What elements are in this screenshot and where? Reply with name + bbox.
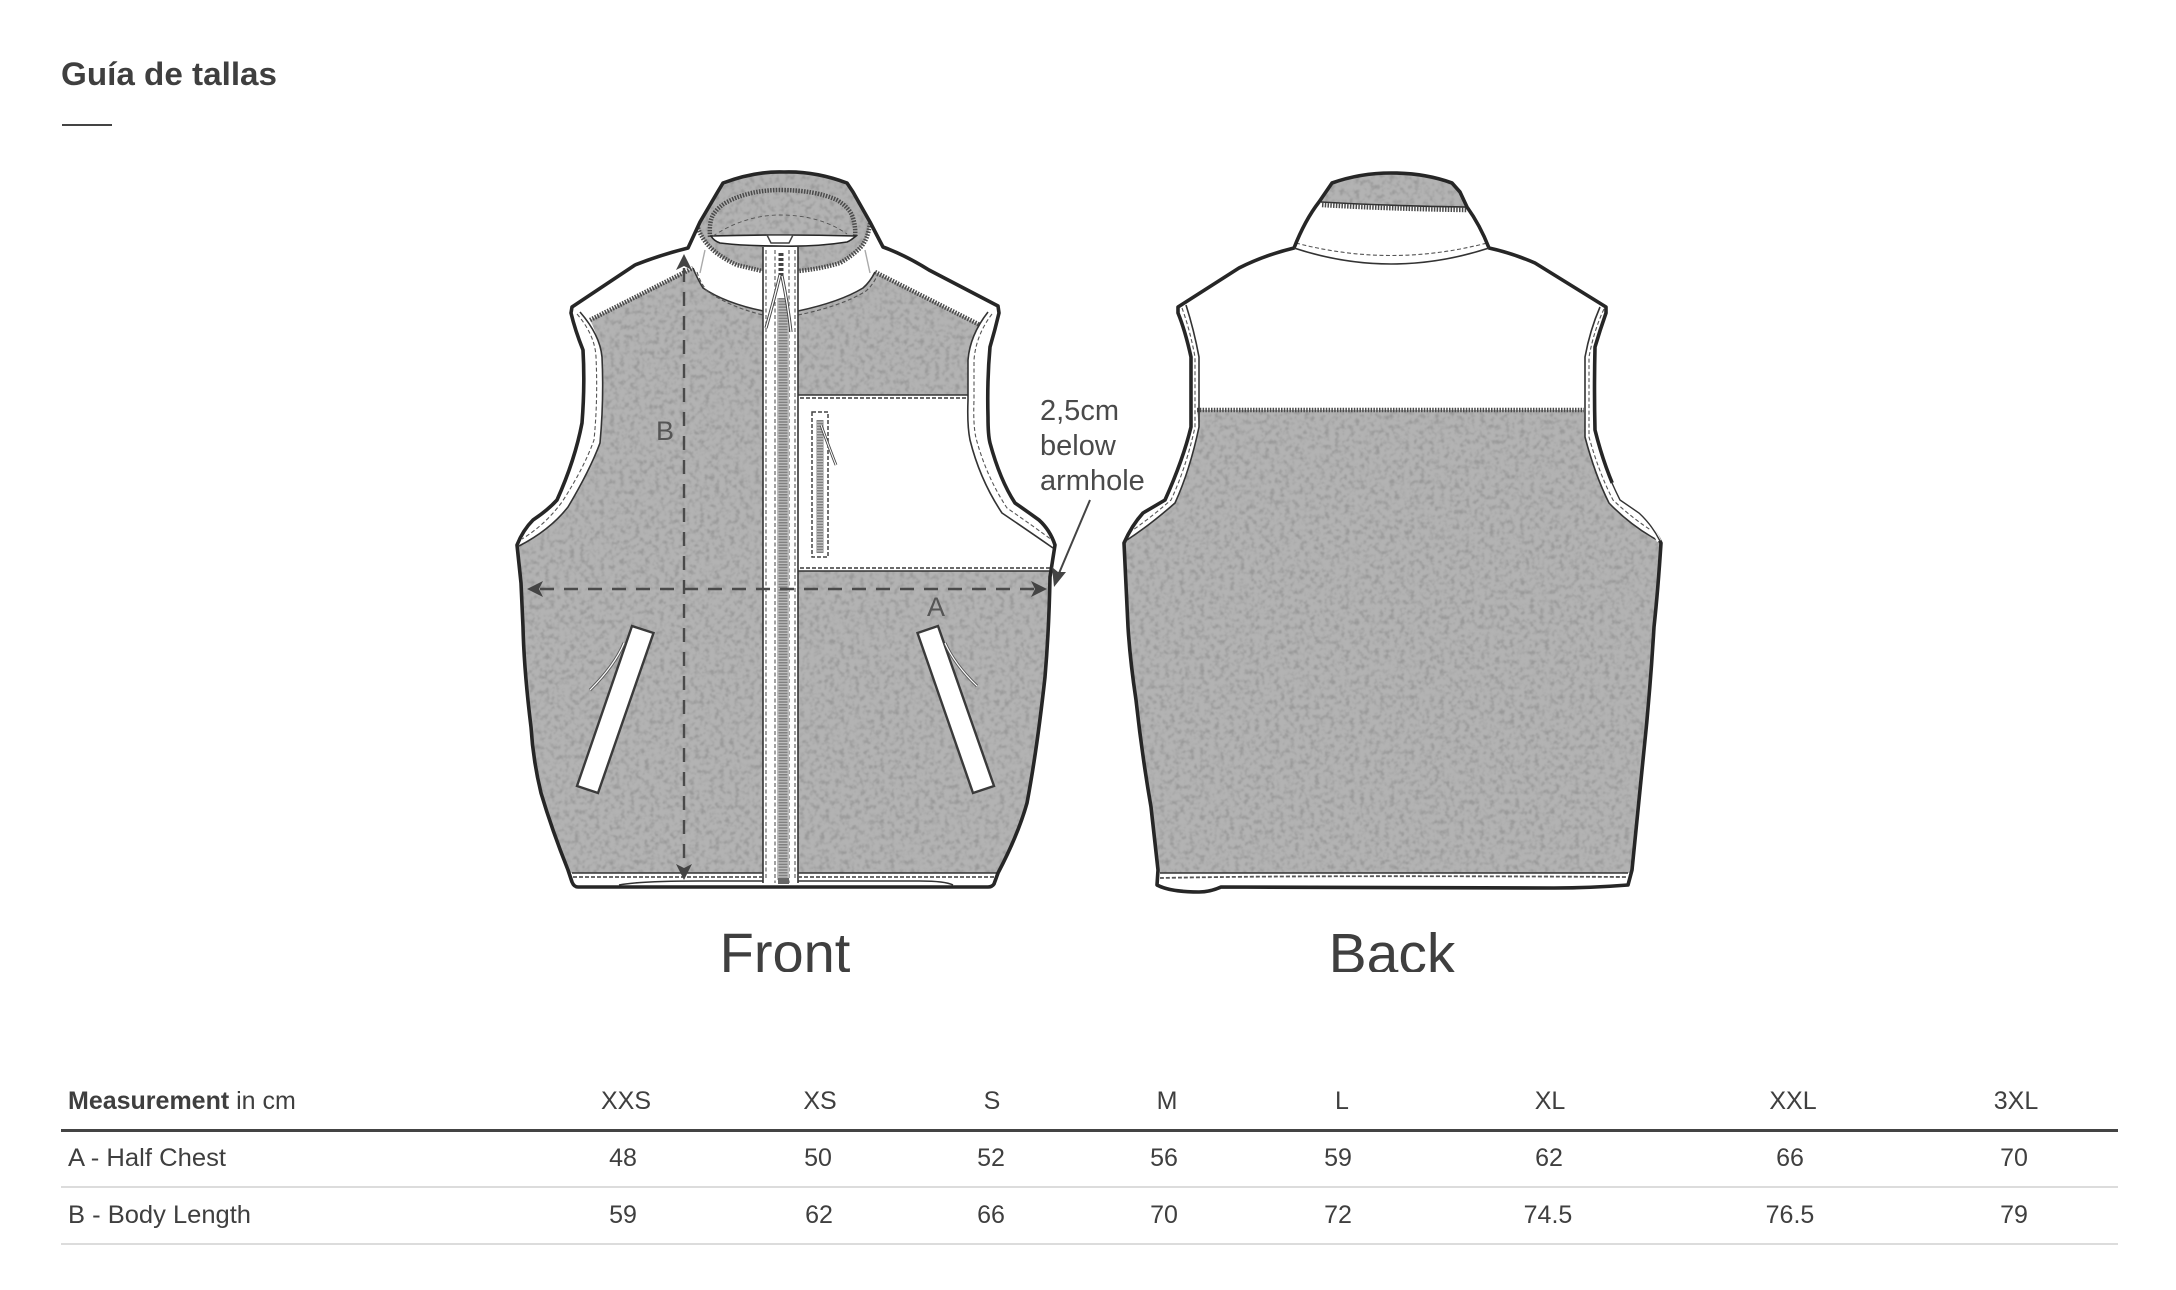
size table	[61, 1087, 2118, 1245]
row: half chest	[68, 1144, 2028, 1172]
row: body length: 76.5	[1766, 1201, 1814, 1229]
right hand pocket	[918, 626, 994, 793]
title: Guía de tallas	[61, 56, 277, 92]
front seams and binding	[519, 223, 1053, 571]
row: half chest: 52	[977, 1144, 1005, 1172]
front inner collar	[710, 190, 856, 246]
front fleece panels	[519, 172, 1051, 873]
table header: S	[984, 1087, 1000, 1115]
row: body length: 62	[805, 1201, 833, 1229]
table header: Measurement in cm	[68, 1087, 296, 1115]
row: body length: 70	[1150, 1201, 1178, 1229]
chest pocket zipper	[812, 412, 836, 557]
armhole note: armhole	[1040, 465, 1145, 497]
table header: M	[1157, 1087, 1177, 1115]
measurement B arrow	[676, 254, 692, 880]
front collar fold marks	[700, 250, 870, 273]
row: half chest: 59	[1324, 1144, 1352, 1172]
table header: XL	[1535, 1087, 1565, 1115]
measurement B label: B	[656, 416, 674, 446]
table header: L	[1335, 1087, 1349, 1115]
back vest drawing	[1124, 173, 1661, 892]
row: half chest: 62	[1535, 1144, 1563, 1172]
front outline	[517, 172, 1055, 887]
row: body length: 74.5	[1524, 1201, 1572, 1229]
armhole note: 2,5cm	[1040, 395, 1119, 427]
front label: Front	[720, 921, 851, 984]
measurement A label: A	[927, 592, 945, 622]
front vest drawing	[517, 172, 1055, 887]
armhole note arrow	[1052, 500, 1090, 587]
table header: XXL	[1769, 1087, 1817, 1115]
back collar base line	[1294, 248, 1489, 264]
row: half chest: 50	[804, 1144, 832, 1172]
front hem	[572, 873, 997, 885]
front silhouette	[517, 172, 1055, 887]
row: body length: 72	[1324, 1201, 1352, 1229]
table header: XXS	[601, 1087, 651, 1115]
table header	[68, 1087, 2038, 1115]
back right underarm thin edge	[1612, 483, 1660, 541]
table header: 3XL	[1994, 1087, 2038, 1115]
row: body length: B - Body Length	[68, 1201, 251, 1229]
row: half chest: 66	[1776, 1144, 1804, 1172]
row: half chest: 48	[609, 1144, 637, 1172]
row: half chest: A - Half Chest	[68, 1144, 226, 1172]
row: body length: 79	[2000, 1201, 2028, 1229]
row: body length	[68, 1201, 2028, 1229]
row: body length: 59	[609, 1201, 637, 1229]
left hand pocket	[577, 626, 654, 793]
measurement A arrow	[527, 581, 1047, 597]
table header: XS	[803, 1087, 837, 1115]
row: half chest: 56	[1150, 1144, 1178, 1172]
back silhouette	[1124, 173, 1661, 892]
title underline	[62, 124, 112, 126]
back label: Back	[1329, 922, 1456, 986]
row: body length: 66	[977, 1201, 1005, 1229]
back outline	[1124, 173, 1661, 892]
front zipper placket	[763, 247, 798, 884]
armhole note: below	[1040, 430, 1117, 462]
back seams and binding	[1127, 202, 1657, 878]
back fleece panels	[1124, 173, 1661, 873]
row: half chest: 70	[2000, 1144, 2028, 1172]
zipper pull	[778, 253, 784, 276]
